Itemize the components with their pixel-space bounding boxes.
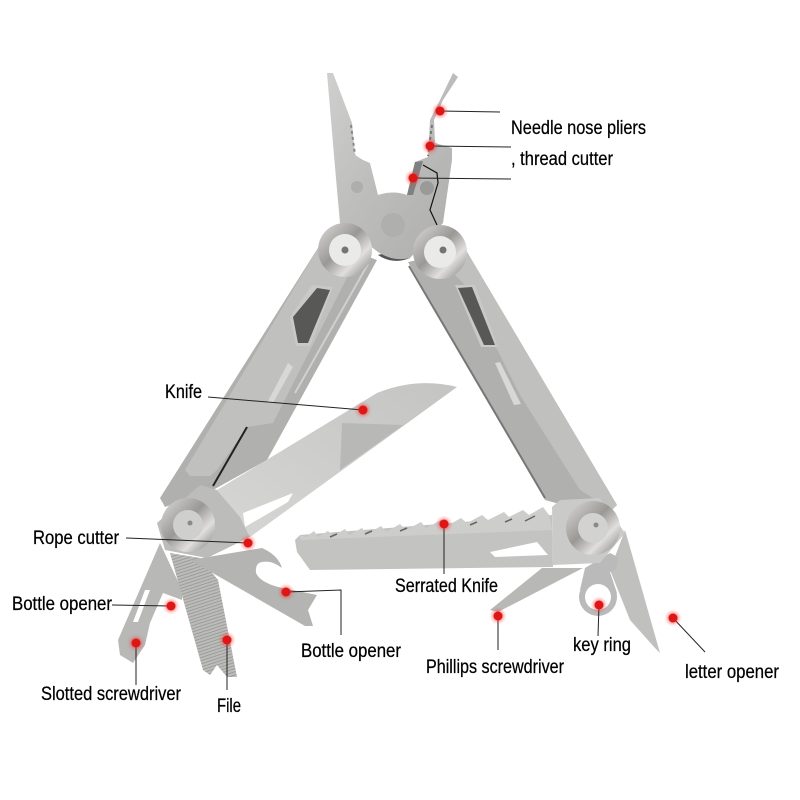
leader lines (112, 111, 705, 690)
right handle (408, 250, 617, 515)
pivot: bottom left (157, 485, 250, 558)
file (170, 553, 237, 677)
phillips screwdriver (490, 568, 583, 612)
label: bottle opener left: Bottle opener (12, 594, 113, 615)
labels (12, 118, 780, 717)
pivot: top left (318, 223, 372, 277)
label: needle nose pliers: Needle nose pliers (511, 118, 646, 139)
label: knife: Knife (165, 382, 202, 403)
key ring (579, 553, 618, 616)
icon: multitool (118, 73, 660, 677)
pivot: bottom right (552, 498, 625, 565)
label: slotted screwdriver: Slotted screwdriver (41, 684, 182, 705)
serrated knife (295, 507, 553, 570)
label: letter opener: letter opener (685, 662, 780, 683)
needle nose pliers (327, 73, 458, 261)
label: thread cutter: , thread cutter (511, 149, 614, 170)
label: key ring: key ring (573, 635, 631, 656)
label: serrated knife: Serrated Knife (395, 576, 498, 597)
red marker dots (130, 105, 679, 649)
label: file: File (217, 696, 241, 717)
label: rope cutter: Rope cutter (33, 528, 120, 549)
right bottle opener (190, 548, 317, 626)
pivot: top right (413, 225, 467, 279)
label: bottle opener right: Bottle opener (301, 641, 402, 662)
knife blade (217, 383, 457, 537)
letter opener (610, 530, 660, 653)
label: phillips screwdriver: Phillips screwdriver (426, 657, 565, 678)
left handle (160, 240, 377, 507)
left opener with slotted screwdriver (118, 543, 182, 663)
